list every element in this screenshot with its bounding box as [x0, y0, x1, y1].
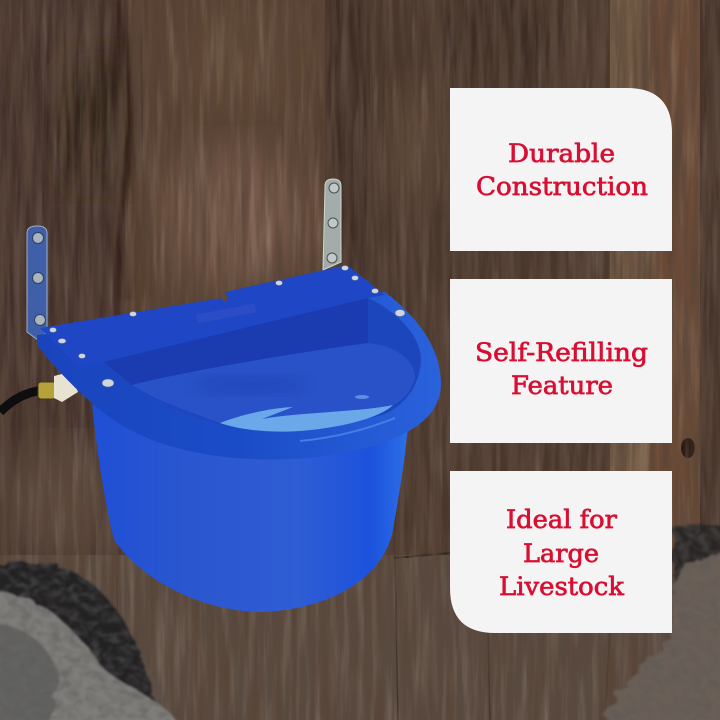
panel text	[476, 139, 648, 201]
right mounting bracket	[323, 179, 341, 270]
plate front wall	[104, 298, 368, 385]
panel text	[475, 338, 648, 400]
water surface	[132, 343, 415, 432]
rim underside highlight	[300, 418, 395, 441]
fur: animal at right	[600, 525, 720, 720]
hose and fitting	[0, 372, 78, 412]
water bucket product	[0, 179, 441, 612]
panel: self-refilling feature	[450, 279, 672, 443]
panel text: Livestock	[499, 572, 625, 601]
panel text: Durable	[508, 139, 615, 168]
panel text: Construction	[476, 172, 648, 201]
panel: durable construction	[450, 88, 672, 251]
panel: ideal for large livestock	[450, 471, 672, 633]
top back plate	[40, 265, 385, 368]
panel text: Ideal for	[506, 505, 617, 534]
panel text	[499, 505, 625, 601]
panel text: Feature	[511, 371, 613, 400]
bucket rim	[37, 292, 441, 459]
rim screws	[50, 266, 405, 387]
bucket body	[92, 405, 408, 612]
panel text: Self-Refilling	[475, 338, 648, 367]
bucket interior	[103, 298, 421, 429]
panel text: Large	[523, 539, 599, 568]
fur: animal at left	[0, 560, 180, 720]
left mounting bracket	[27, 226, 47, 340]
logo emboss	[196, 303, 256, 324]
